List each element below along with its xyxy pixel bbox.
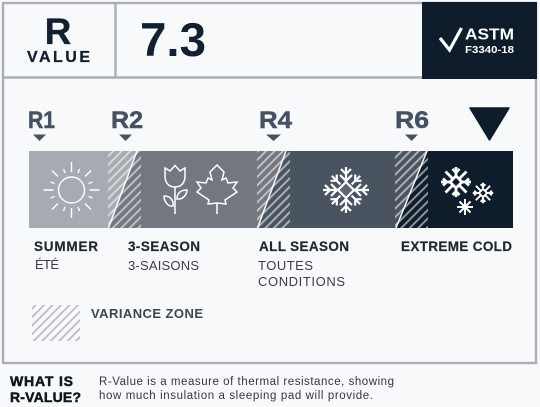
thermal scale bar (29, 151, 513, 228)
season labels: EXTREME COLD (401, 239, 512, 254)
icon: check mark (440, 28, 462, 50)
season labels: SUMMER (34, 239, 98, 254)
French labels: 3-SAISONS (128, 258, 199, 273)
icon: snowflake (323, 167, 369, 213)
footer heading: R-VALUE? (10, 389, 81, 405)
footer text (99, 376, 394, 402)
French labels: TOUTES (258, 258, 313, 273)
ASTM text (465, 26, 514, 56)
heading: R value (27, 11, 90, 66)
icon: sun (44, 162, 100, 218)
footer heading (10, 373, 81, 405)
heading: R value: VALUE (27, 49, 90, 66)
French labels: ÉTÉ (35, 257, 59, 272)
legend: hatch swatch (32, 305, 80, 341)
ASTM text: F3340-18 (465, 44, 514, 56)
footer text: R-Value is a measure of thermal resistance, showing (99, 376, 394, 388)
footer heading: WHAT IS (10, 373, 73, 389)
zone: extreme cold (396, 151, 513, 228)
badge: ASTM (422, 2, 537, 79)
heading: R value: R (45, 11, 71, 52)
value 7.3: 7.3 (140, 13, 206, 66)
season labels: 3-SEASON (128, 239, 200, 254)
scale labels: R1 (28, 107, 55, 134)
legend: variance zone: VARIANCE ZONE (91, 306, 203, 321)
scale labels: R4 (259, 107, 293, 134)
scale labels: R2 (111, 107, 143, 134)
French labels: CONDITIONS (258, 274, 345, 289)
scale tick markers (33, 134, 418, 141)
icon: snowflakes (441, 167, 493, 215)
zone: all season (258, 151, 410, 228)
footer text: how much insulation a sleeping pad will provide. (99, 390, 373, 402)
zone: 3-season (108, 151, 270, 228)
slanted dividers (108, 151, 427, 228)
scale labels (28, 107, 429, 134)
icon: maple leaf (197, 165, 237, 214)
French labels (35, 257, 345, 289)
zone: summer (29, 151, 137, 228)
icon: tulip (164, 166, 187, 214)
season labels: ALL SEASON (259, 239, 349, 254)
ASTM text: ASTM (465, 26, 514, 44)
current value marker (470, 108, 509, 140)
variance hatches (108, 151, 428, 228)
season labels (34, 239, 512, 254)
scale labels: R6 (395, 107, 429, 134)
header divider (3, 3, 423, 78)
